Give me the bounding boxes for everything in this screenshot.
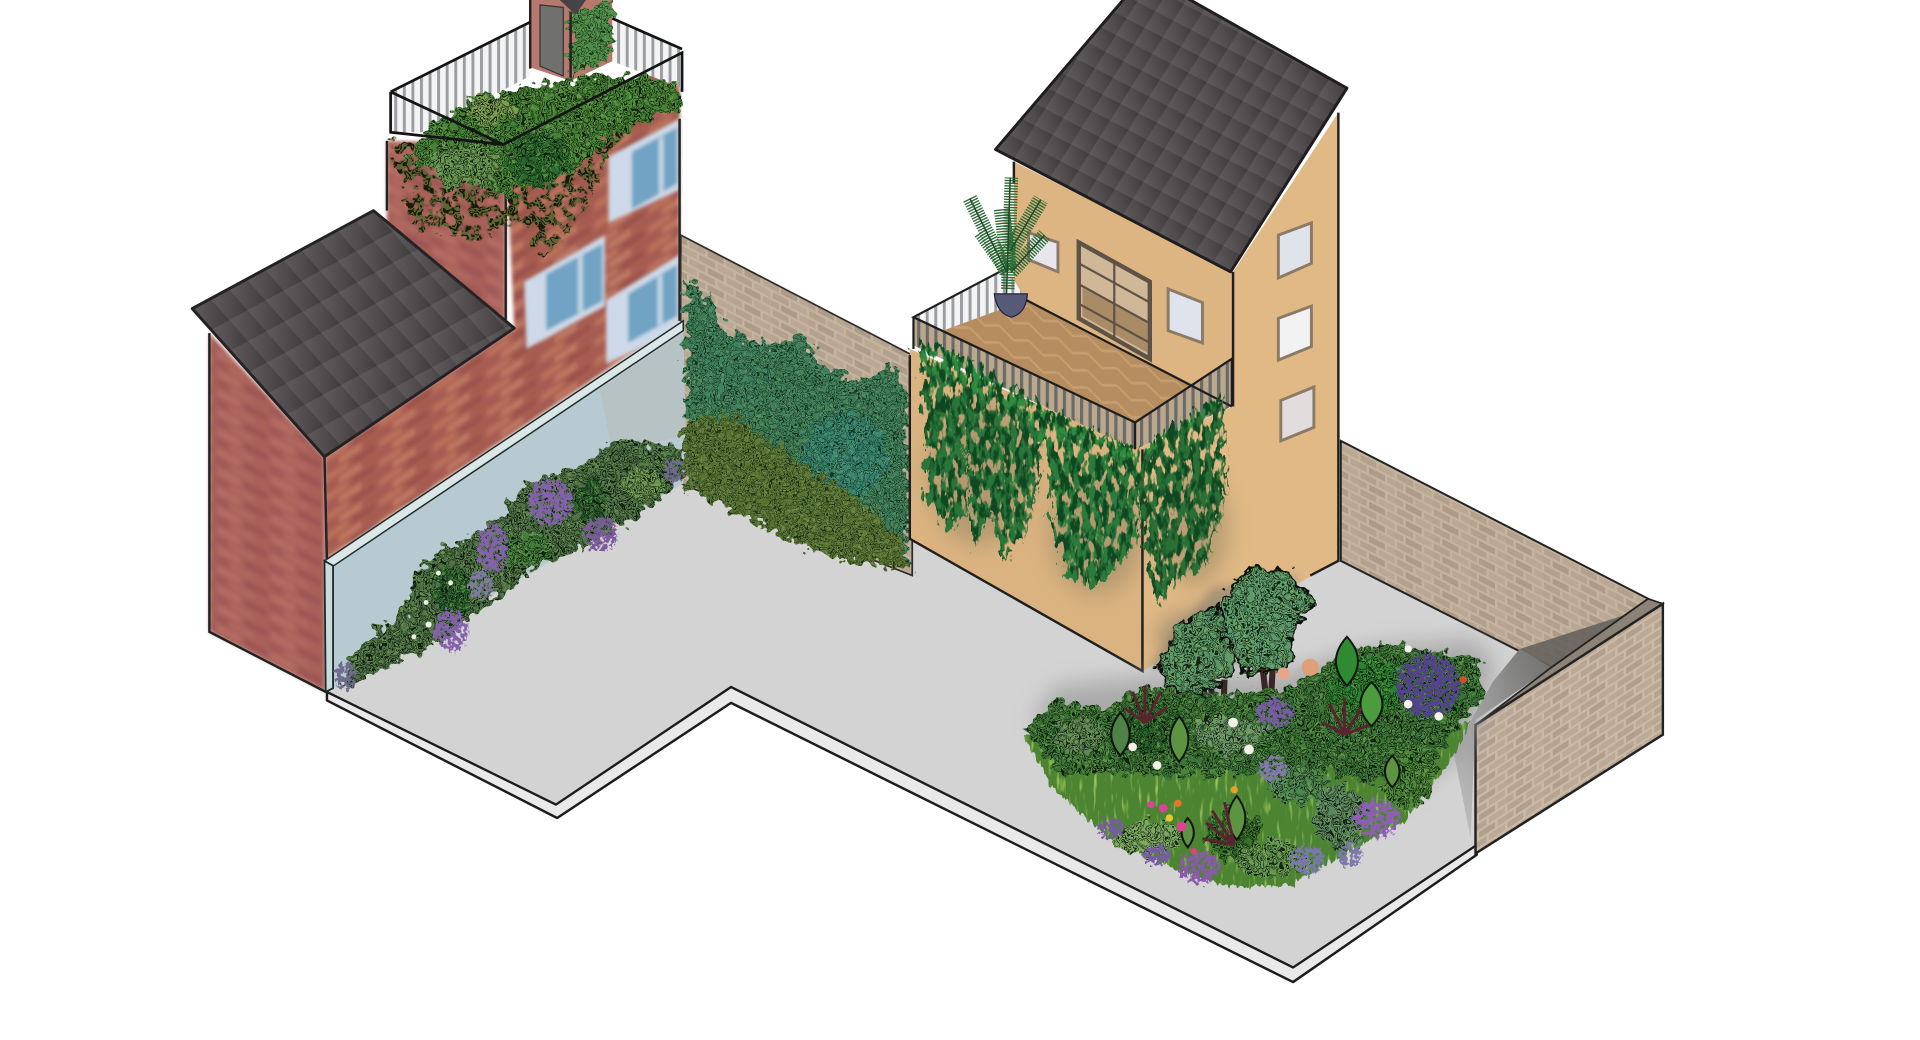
wall shadow [1520, 609, 1644, 667]
trunks [1210, 655, 1273, 747]
house outlines [910, 113, 1338, 671]
purple flower clumps [1098, 654, 1461, 884]
back railing left [391, 22, 530, 132]
green roof foliage [407, 76, 681, 196]
wall shadow of tree [1149, 576, 1298, 667]
door [540, 5, 563, 76]
sliding door [1079, 242, 1150, 359]
dense upper planting [1026, 645, 1484, 784]
terrace lines [913, 268, 1232, 449]
window upper right [609, 119, 680, 223]
palm stem [970, 178, 1044, 294]
long wall [324, 59, 680, 561]
back railing [913, 268, 1026, 349]
climber left 2 [965, 380, 1041, 561]
foreground shrubs [1114, 746, 1435, 878]
top roof terrace, left house [389, 0, 682, 260]
white flowers [411, 571, 453, 639]
canopies [1157, 566, 1315, 692]
side window 2 [1278, 306, 1311, 360]
white star flowers [1128, 645, 1443, 770]
hanging climbers [916, 343, 1227, 602]
lower block face [910, 349, 1142, 671]
window middle [524, 235, 605, 349]
climber shadows [928, 398, 1231, 661]
glass top rail [324, 321, 683, 567]
upper left face [1014, 162, 1233, 407]
roof [192, 211, 514, 457]
chimney cap [557, 0, 588, 15]
glass balustrade [324, 321, 686, 692]
right tan house [910, 0, 1347, 671]
slab top lines [327, 687, 1477, 967]
lower olive shrubs [683, 414, 909, 568]
right face [1135, 113, 1338, 671]
palm fronds [970, 178, 1044, 289]
pot [994, 294, 1027, 317]
house outlines [209, 119, 680, 692]
front window [1168, 289, 1202, 343]
dark red spiky plants [1124, 686, 1369, 845]
climber band [916, 343, 1224, 490]
tower left face [387, 141, 506, 337]
purple flowers [336, 459, 687, 689]
green wall [683, 279, 909, 568]
side window 1 [1278, 223, 1311, 278]
terrace [913, 268, 1232, 449]
planting bed along glass [336, 441, 687, 689]
door interior [1082, 288, 1147, 353]
trailing brown ivy [389, 88, 676, 260]
foliage mass [342, 441, 683, 689]
rear brick wall, right [1341, 441, 1663, 853]
climber left 1 [923, 361, 967, 527]
deck [943, 300, 1195, 422]
small pink, orange and yellow flowers [1147, 659, 1467, 854]
small window behind palm [1029, 233, 1058, 272]
ground slab [327, 484, 1551, 982]
glass end post [324, 561, 333, 692]
tree [1157, 566, 1315, 747]
palm in pot [970, 178, 1044, 317]
climber right [1139, 398, 1227, 602]
left brick house [192, 59, 680, 692]
wall coping [1476, 599, 1663, 725]
large outlined leaves [1111, 637, 1400, 847]
wall creeper [571, 0, 612, 76]
front railing lines [391, 18, 682, 145]
front right wall [1476, 604, 1663, 853]
floor shadow [1453, 649, 1551, 838]
climber centre [1048, 422, 1139, 590]
back railing right [612, 18, 682, 88]
slab edge [327, 687, 1477, 982]
side window 3 [1281, 387, 1314, 441]
far right rail [1135, 359, 1232, 449]
meadow ground [1024, 722, 1469, 887]
upper teal climbers [686, 279, 909, 566]
rear brick wall, centre [681, 235, 912, 576]
front rail [913, 317, 1135, 449]
bed shadow [1031, 639, 1496, 808]
chimney box [530, 0, 612, 81]
floor surface [327, 484, 1551, 967]
brick seen through glass [600, 333, 686, 453]
main planting bed [1024, 566, 1496, 887]
window lower right [606, 255, 680, 364]
roof [996, 0, 1347, 272]
gable wall [209, 333, 326, 692]
